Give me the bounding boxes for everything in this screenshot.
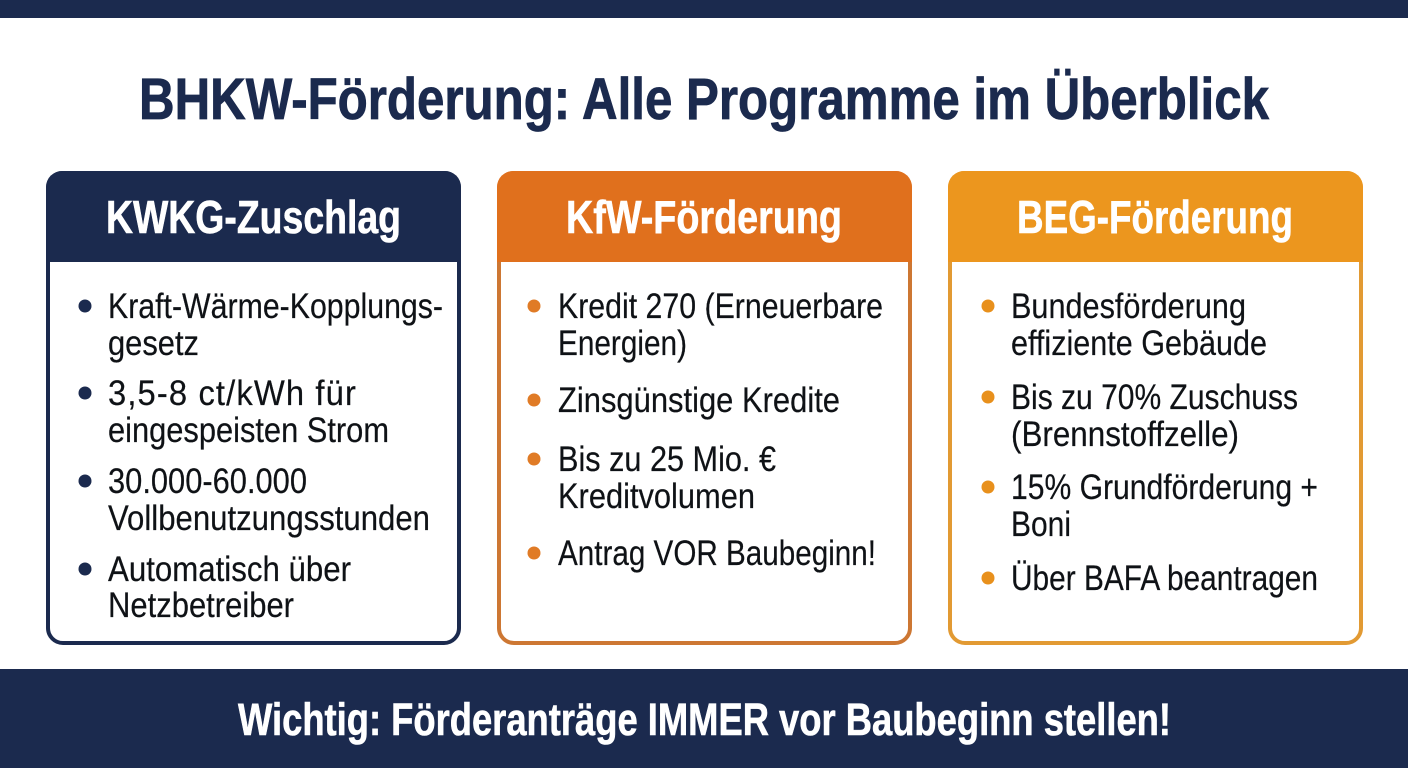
bullet: Kraft-Wärme-Kopplungsgesetz: Kraft-Wärme-Kopplungs- — [108, 287, 443, 326]
bullet: Kredit 270: Energien) — [558, 324, 687, 363]
panel: BEG-Förderung — [948, 171, 1363, 643]
panel: KWKG-Zuschlag — [46, 171, 461, 643]
bullet: Vergütung: eingespeisten Strom — [108, 411, 389, 450]
footer text: Wichtig: Förderanträge IMMER vor Baubeginn stellen! — [238, 694, 1171, 745]
heading: BEG-Förderung — [1017, 191, 1293, 243]
panel header — [46, 171, 461, 262]
bullet: Kreditvolumen: Kreditvolumen — [558, 477, 755, 516]
top bar — [0, 0, 1408, 18]
panel frame — [950, 173, 1361, 643]
bullet: Kraft-Wärme-Kopplungsgesetz — [78, 287, 443, 363]
bullet: Zuschuss — [982, 378, 1298, 454]
bullet: Vollbenutzungsstunden: 30.000-60.000 — [108, 462, 307, 501]
bullet: BAFA: Über BAFA beantragen — [1011, 559, 1318, 598]
panel frame — [499, 173, 910, 643]
bullet: Antrag: Antrag VOR Baubeginn! — [558, 534, 876, 573]
bullet: Bundesförderung — [982, 287, 1267, 363]
bullet: Zinsgünstige Kredite: Zinsgünstige Kredite — [558, 381, 840, 420]
bullet: Zuschuss: (Brennstoffzelle) — [1011, 415, 1239, 454]
bullet: Kredit 270: Kredit 270 (Erneuerbare — [558, 287, 883, 326]
bullet: Vergütung: 3,5-8 ct/kWh für — [108, 374, 357, 413]
bullet: Grundförderung — [982, 468, 1318, 544]
bullet: Kreditvolumen — [528, 440, 776, 516]
bullet: Kredit 270 — [528, 287, 883, 363]
panel: KfW-Förderung — [497, 171, 912, 643]
panel header — [497, 171, 912, 262]
bullet: Kreditvolumen: Bis zu 25 Mio. € — [558, 440, 776, 479]
bullet: Netzbetreiber: Automatisch über — [108, 550, 351, 589]
heading: KfW-Förderung — [566, 191, 842, 243]
heading: KWKG-Zuschlag — [106, 191, 401, 243]
bullet: Vollbenutzungsstunden: Vollbenutzungsstunden — [108, 499, 430, 538]
bullet: Bundesförderung: Bundesförderung — [1011, 287, 1246, 326]
panel header — [948, 171, 1363, 262]
bullet: Grundförderung: Boni — [1011, 505, 1071, 544]
bullet: Kraft-Wärme-Kopplungsgesetz: gesetz — [108, 324, 199, 363]
footer banner — [0, 669, 1408, 768]
bullet: Zuschuss: Bis zu 70% Zuschuss — [1011, 378, 1298, 417]
bullet: Vollbenutzungsstunden — [78, 462, 430, 538]
bullet: Netzbetreiber — [78, 550, 351, 625]
bullet: Netzbetreiber: Netzbetreiber — [108, 586, 294, 625]
bullet: Vergütung — [78, 374, 389, 450]
bullet: Bundesförderung: effiziente Gebäude — [1011, 324, 1267, 363]
bullet: Grundförderung: 15% Grundförderung + — [1011, 468, 1318, 507]
panel frame — [48, 173, 459, 643]
